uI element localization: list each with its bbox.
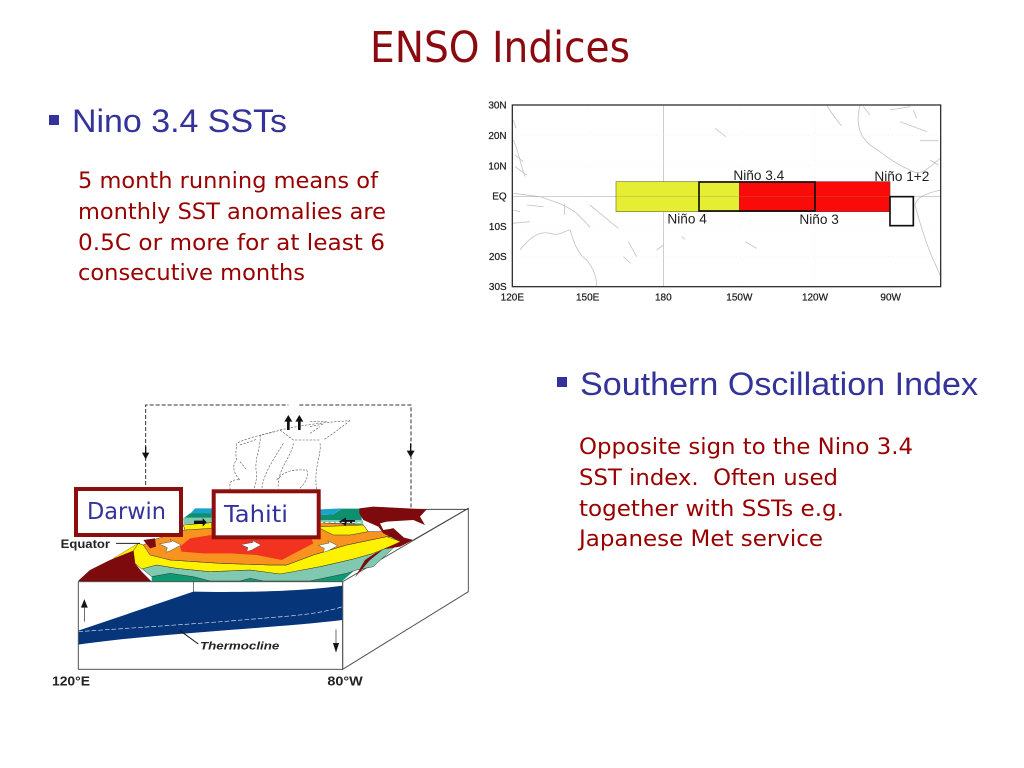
diagram: Walker circulation and thermocline xyxy=(52,405,468,689)
equator label: Equator xyxy=(61,538,111,551)
coastlines xyxy=(513,105,941,287)
heading: Nino 3.4 SSTs: Nino 3.4 SSTs xyxy=(72,103,287,139)
text block: SOI description: SST index. Often used xyxy=(579,466,838,491)
bullet xyxy=(49,115,59,125)
x axis labels: 150W xyxy=(726,292,753,303)
longitude labels: 120°E xyxy=(52,675,90,689)
y axis labels: 30S xyxy=(489,282,507,293)
region labels: Niño 3 xyxy=(799,212,839,227)
subsidence arrows xyxy=(142,443,415,459)
land masses xyxy=(78,538,156,582)
text block: Nino 3.4 definition: 5 month running means of xyxy=(78,169,379,194)
x axis labels: 150E xyxy=(576,292,600,303)
text block: Nino 3.4 definition: monthly SST anomalies are xyxy=(78,200,386,225)
thermocline water xyxy=(78,586,343,645)
thermocline arrows xyxy=(81,600,339,652)
Nino 4 yellow region xyxy=(616,182,739,212)
bullet xyxy=(557,377,567,387)
pale surface dashes xyxy=(320,521,362,524)
section: Southern Oscillation Index xyxy=(557,366,978,402)
x axis labels: 90W xyxy=(880,292,902,303)
x axis labels: 180 xyxy=(655,292,672,303)
cloud xyxy=(230,421,350,490)
y axis labels: 10S xyxy=(489,222,507,233)
title: ENSO Indices xyxy=(370,23,630,73)
grid lines xyxy=(512,105,941,287)
thermocline label: Thermocline xyxy=(200,640,279,652)
Nino 1+2 box xyxy=(890,197,913,226)
text block: SOI description: Opposite sign to the Nino 3.4 xyxy=(579,435,913,460)
wind arrows xyxy=(194,517,355,527)
text block: Nino 3.4 definition xyxy=(78,169,386,286)
text block: Nino 3.4 definition: 0.5C or more for at least 6 xyxy=(78,231,385,256)
box back edge xyxy=(413,508,468,540)
thermocline label xyxy=(180,631,279,652)
y axis labels: 10N xyxy=(488,161,507,172)
text block: SOI description xyxy=(577,435,913,552)
heading: Southern Oscillation Index: Southern Oscillation Index xyxy=(580,366,978,402)
text block: Nino 3.4 definition: consecutive months xyxy=(78,261,305,286)
y axis labels: EQ xyxy=(492,192,507,203)
cloud updraft arrows xyxy=(284,415,303,430)
label box: Tahiti xyxy=(214,491,319,537)
surface current arrows xyxy=(159,539,181,552)
diagram: Walker circulation and thermocline: 80°W xyxy=(327,675,363,689)
atmospheric circulation dashed loop xyxy=(146,405,411,508)
Nino 3.4 box xyxy=(699,182,815,211)
box side face xyxy=(343,508,468,669)
text block: SOI description: together with SSTs e.g. xyxy=(579,497,844,522)
region labels: Niño 1+2 xyxy=(874,169,929,184)
region labels xyxy=(667,168,929,227)
label box: Darwin xyxy=(76,489,181,535)
x axis labels: 120W xyxy=(802,292,829,303)
region labels: Niño 4 xyxy=(667,211,707,226)
label box: Darwin: Darwin xyxy=(87,499,166,525)
label box: Tahiti: Tahiti xyxy=(223,502,288,528)
y axis labels: 30N xyxy=(488,101,507,112)
y axis labels: 20S xyxy=(489,252,507,263)
map frame xyxy=(512,105,941,287)
x axis labels xyxy=(501,292,902,303)
section: Nino 3.4 SSTs xyxy=(49,103,287,139)
text block: SOI description: Japanese Met service xyxy=(577,527,823,552)
y axis labels: 20N xyxy=(488,131,507,142)
region labels: Niño 3.4 xyxy=(733,168,785,183)
box front face xyxy=(78,582,343,669)
x axis labels: 120E xyxy=(501,292,524,303)
equator label xyxy=(61,538,140,551)
surface bands xyxy=(113,508,403,582)
Nino 3 red region xyxy=(739,182,890,212)
chart: Nino regions map xyxy=(488,101,941,303)
y axis labels xyxy=(488,101,507,293)
